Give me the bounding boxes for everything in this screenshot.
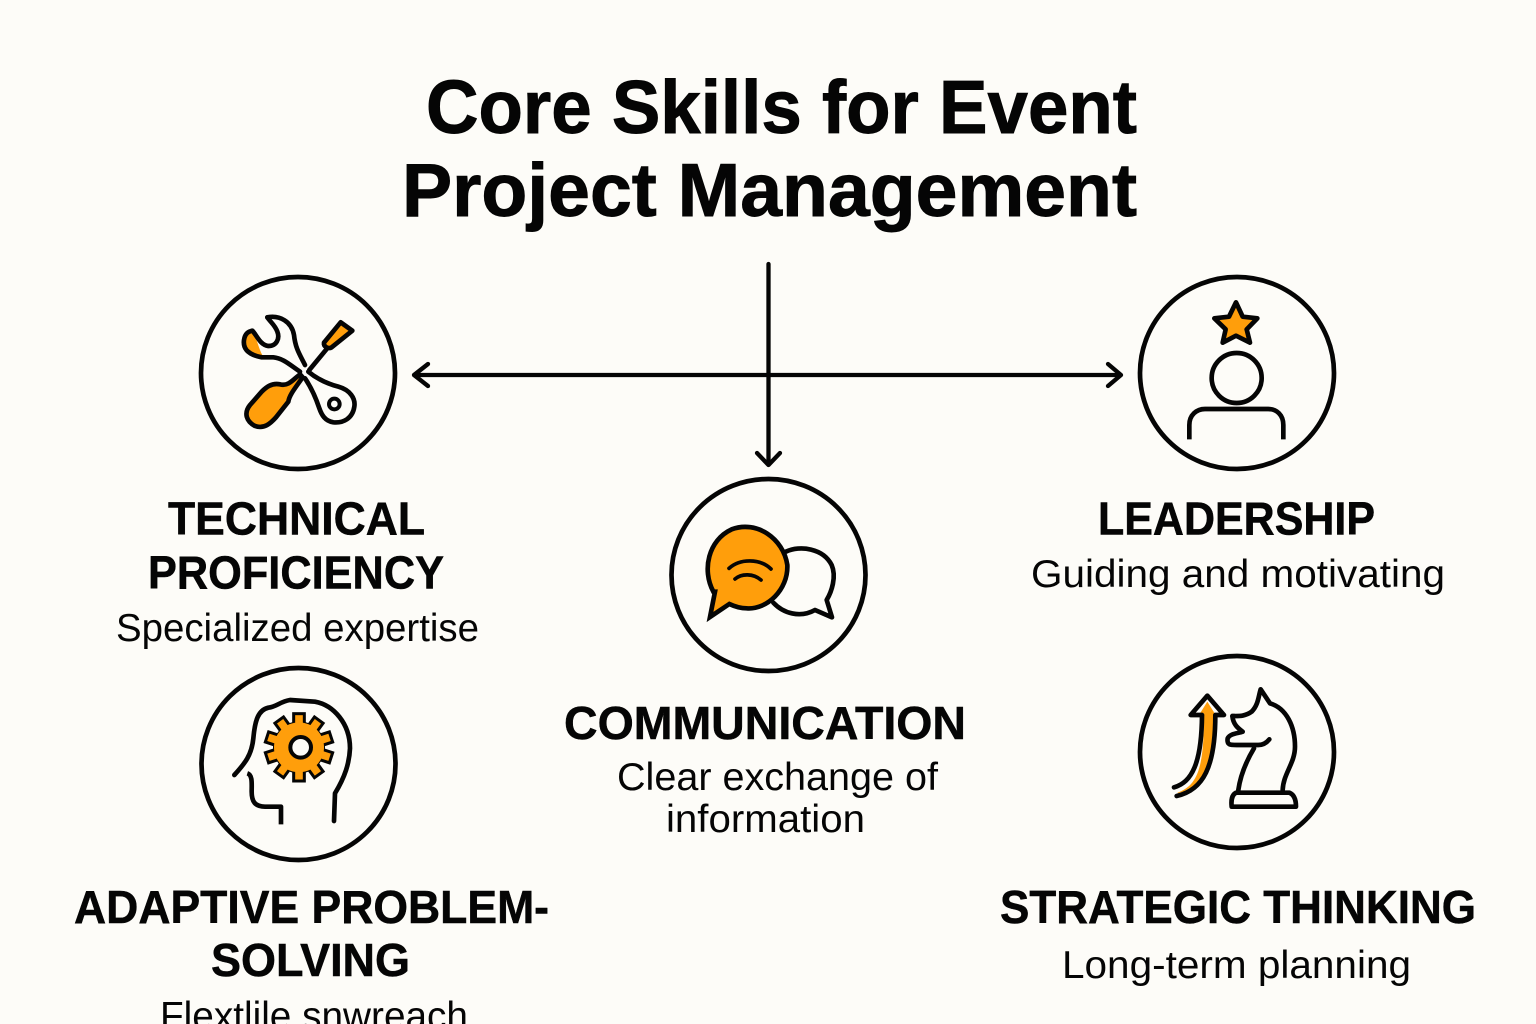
heading: technical proficiency: PROFICIENCY (148, 546, 444, 598)
icon: head with gear (202, 668, 396, 860)
icon: person with star (1140, 277, 1334, 469)
arrow: horizontal two-way (414, 364, 1121, 386)
icon: speech bubbles (672, 479, 866, 671)
text: long-term planning: Long-term planning (1062, 944, 1411, 987)
heading: technical proficiency: TECHNICAL (168, 492, 425, 544)
panel: communication (564, 479, 966, 841)
icon: arrow and chess knight (1140, 656, 1334, 848)
text: clear exchange of information: information (666, 798, 865, 841)
heading: adaptive problem-solving: ADAPTIVE PROBLEM- (74, 881, 549, 933)
title: Core Skills for Event (426, 65, 1137, 149)
panel: strategic thinking (1000, 656, 1476, 987)
text: specialized expertise: Specialized expertise (116, 607, 479, 650)
arrow: vertical down to communication (757, 264, 780, 465)
icon: wrench and screwdriver (201, 277, 395, 469)
heading: adaptive problem-solving: SOLVING (211, 934, 410, 986)
title (402, 65, 1137, 232)
text: clear exchange of information (617, 756, 938, 841)
panel: technical proficiency (116, 277, 479, 650)
text: clear exchange of information: Clear exchange of (617, 756, 938, 799)
heading: strategic thinking: STRATEGIC THINKING (1000, 881, 1476, 933)
heading: adaptive problem-solving (74, 881, 549, 986)
text: guiding and motivating: Guiding and motivating (1031, 553, 1445, 596)
heading: leadership: LEADERSHIP (1098, 492, 1375, 544)
title: Project Management (402, 148, 1137, 232)
panel: adaptive problem-solving (74, 668, 549, 1024)
heading: technical proficiency (148, 492, 444, 598)
panel: leadership (1031, 277, 1445, 596)
heading: communication: COMMUNICATION (564, 697, 966, 749)
